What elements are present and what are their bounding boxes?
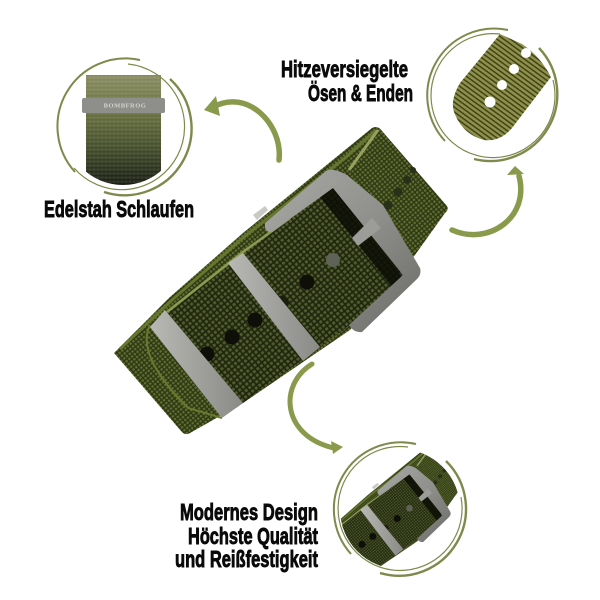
label: sealed eyelets and ends: Hitzeversiegelte <box>281 56 408 82</box>
miniature strap <box>340 452 458 566</box>
label: design, quality, tear strength: Modernes Design <box>180 499 318 525</box>
eyelet holes <box>484 48 531 108</box>
label: design, quality, tear strength: Höchste Qualität <box>188 523 318 549</box>
label: design, quality, tear strength: und Reißfestigkeit <box>175 546 318 572</box>
panel: modern design detail circle <box>332 441 468 577</box>
strap tip with eyelets <box>453 34 551 140</box>
ring arcs <box>57 58 192 195</box>
main product: olive watch strap <box>114 127 448 434</box>
strap close-up with keeper <box>86 75 161 187</box>
label: sealed eyelets and ends <box>281 56 413 106</box>
label: sealed eyelets and ends: Ösen & Enden <box>308 80 413 106</box>
ring arcs <box>427 29 557 161</box>
label: steel loops: Edelstah Schlaufen <box>44 196 194 222</box>
keeper engraving: BOMBFROG <box>104 102 146 110</box>
arrow: main strap to steel loops <box>204 96 279 160</box>
arrow: main strap to sealed ends <box>452 166 524 235</box>
panel: sealed ends detail circle <box>427 29 557 161</box>
label: design, quality, tear strength <box>175 499 318 572</box>
panel: steel loops detail circle <box>57 58 192 195</box>
ring arcs <box>334 442 466 576</box>
arrow: main strap to design detail <box>290 364 343 454</box>
